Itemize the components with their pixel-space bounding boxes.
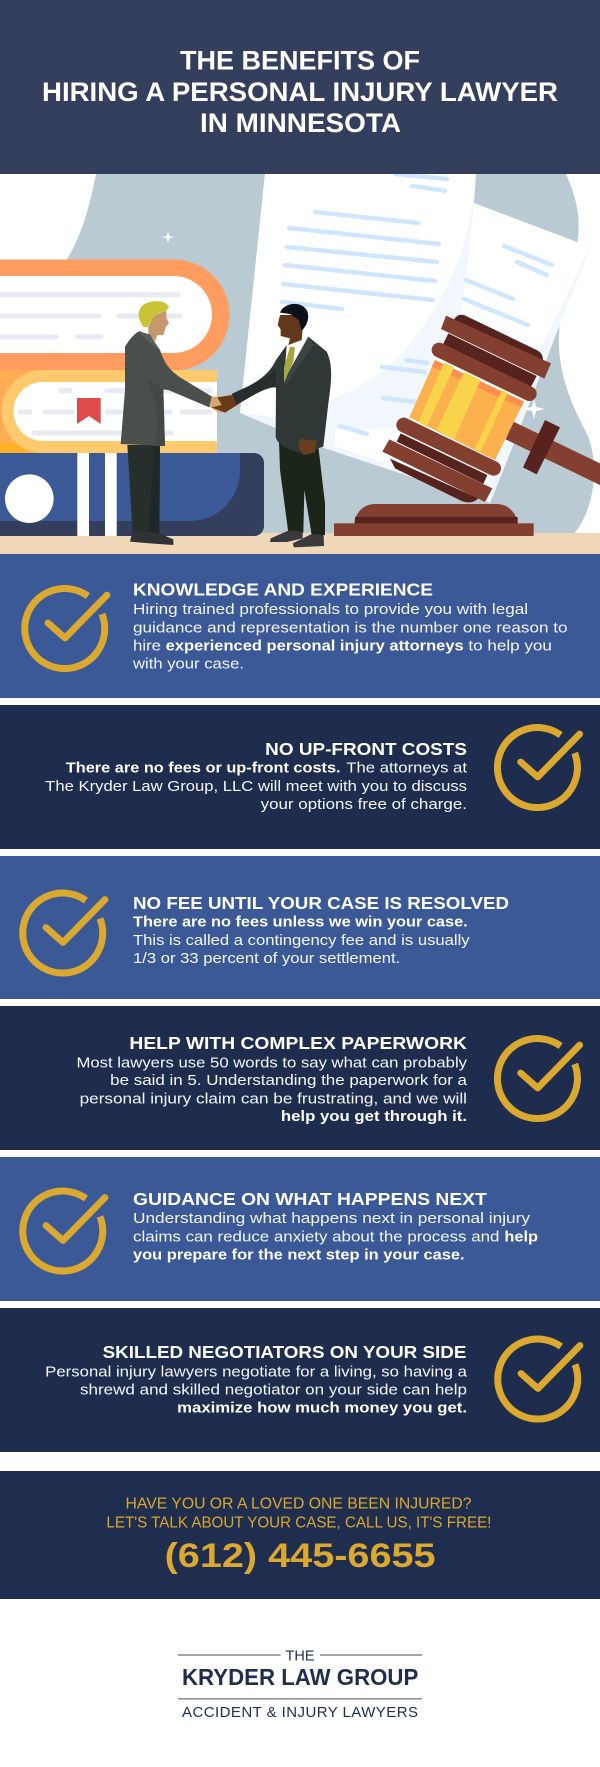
- logo: THE: [286, 1648, 315, 1664]
- neck and face: [278, 315, 303, 345]
- trousers: [127, 445, 160, 535]
- text block: [133, 914, 470, 967]
- man: right lawyer: [212, 304, 331, 547]
- paper sheets: [240, 174, 590, 503]
- text block: guidance and representation is the number one reason to: [133, 620, 568, 637]
- text block: [45, 1364, 468, 1417]
- text block: 1/3 or 33 percent of your settlement.: [133, 950, 400, 967]
- heading: GUIDANCE ON WHAT HAPPENS NEXT: [133, 1189, 487, 1209]
- panel: guidance on what happens next: [0, 1157, 600, 1301]
- icon: check circle: [23, 1191, 105, 1271]
- gavel: [334, 315, 600, 536]
- call to action text: HAVE YOU OR A LOVED ONE BEEN INJURED?: [126, 1495, 472, 1512]
- text block: Understanding what happens next in personal injury: [133, 1210, 530, 1227]
- book: orange: [0, 260, 230, 370]
- text block: Most lawyers use 50 words to say what can probably: [76, 1054, 467, 1071]
- icon: check circle: [498, 1339, 580, 1419]
- illustration: [0, 174, 600, 554]
- heading: NO FEE UNTIL YOUR CASE IS RESOLVED: [133, 893, 509, 913]
- text block: be said in 5. Understanding the paperwork for a: [110, 1072, 468, 1089]
- logo: KRYDER LAW GROUP: [182, 1664, 418, 1690]
- text block: experienced personal injury attorneys: [166, 638, 464, 654]
- panel: knowledge and experience: [0, 554, 600, 698]
- heading: HELP WITH COMPLEX PAPERWORK: [129, 1033, 467, 1053]
- title: [42, 46, 558, 138]
- text block: The Kryder Law Group, LLC will meet with you to discuss: [45, 778, 467, 795]
- text block: your options free of charge.: [261, 796, 467, 813]
- hand: [209, 397, 233, 413]
- man: left lawyer: [121, 301, 233, 545]
- call to action text: LET'S TALK ABOUT YOUR CASE, CALL US, IT'S FREE!: [106, 1514, 491, 1531]
- trousers: [279, 442, 325, 535]
- text block: There are no fees unless we win your case.: [133, 914, 468, 931]
- text block: Personal injury lawyers negotiate for a living, so having a: [45, 1364, 468, 1381]
- text block: help you get through it.: [281, 1108, 467, 1125]
- text block: maximize how much money you get.: [177, 1400, 467, 1417]
- text block: The attorneys at: [346, 760, 468, 777]
- icon: check circle: [23, 893, 105, 973]
- panel: call to action: [0, 1471, 600, 1599]
- panel: no fee until resolved: [0, 856, 600, 999]
- text block: with your case.: [132, 656, 244, 672]
- header panel: [0, 0, 600, 174]
- text block: This is called a contingency fee and is usually: [133, 932, 470, 949]
- text block: personal injury claim can be frustrating, and we will: [80, 1090, 467, 1107]
- title: HIRING A PERSONAL INJURY LAWYER: [42, 77, 558, 107]
- text block: [132, 601, 568, 672]
- logo: [178, 1648, 422, 1721]
- panel: no up-front costs: [0, 705, 600, 849]
- hair: [139, 301, 169, 327]
- text block: Hiring trained professionals to provide you with legal: [133, 601, 528, 618]
- hands: [212, 395, 237, 413]
- jacket: [121, 331, 212, 446]
- gavel handle: [506, 420, 600, 487]
- call to action text: [106, 1495, 491, 1531]
- text block: claims can reduce anxiety about the process and: [133, 1228, 499, 1245]
- title: IN MINNESOTA: [200, 108, 401, 138]
- gavel base: [334, 504, 534, 536]
- bookmark: [77, 398, 101, 424]
- title: THE BENEFITS OF: [180, 46, 420, 76]
- shoes: [270, 531, 303, 542]
- heading: NO UP-FRONT COSTS: [265, 739, 467, 759]
- gavel head: [382, 315, 551, 502]
- text block: shrewd and skilled negotiator on your side can help: [80, 1382, 467, 1399]
- text block: [133, 1210, 538, 1263]
- phone number: (612) 445-6655: [165, 1537, 436, 1575]
- text block: [45, 760, 468, 813]
- shirt: [285, 335, 309, 383]
- heading: SKILLED NEGOTIATORS ON YOUR SIDE: [103, 1342, 466, 1362]
- floor: [0, 533, 600, 554]
- panel: skilled negotiators: [0, 1308, 600, 1452]
- sparkle: [162, 231, 174, 243]
- text block: you prepare for the next step in your case.: [133, 1246, 465, 1263]
- book: yellow: [0, 370, 217, 453]
- text block: to help you: [468, 638, 552, 654]
- icon: check circle: [497, 728, 580, 808]
- text block: [76, 1054, 468, 1125]
- background blob: [0, 174, 594, 536]
- tie: [284, 347, 295, 383]
- logo: ACCIDENT & INJURY LAWYERS: [182, 1704, 418, 1721]
- shoes: [130, 531, 173, 545]
- icon: check circle: [497, 1039, 580, 1119]
- jacket: [232, 337, 331, 453]
- heading: KNOWLEDGE AND EXPERIENCE: [133, 580, 433, 600]
- text block: There are no fees or up-front costs.: [66, 760, 341, 777]
- text block: hire: [133, 638, 161, 654]
- sparkle: [523, 399, 545, 419]
- book: blue: [0, 453, 264, 536]
- panel: complex paperwork: [0, 1006, 600, 1150]
- text block: help: [504, 1228, 538, 1245]
- neck and face: [148, 310, 169, 342]
- icon: check circle: [25, 589, 107, 669]
- hair: [280, 304, 308, 331]
